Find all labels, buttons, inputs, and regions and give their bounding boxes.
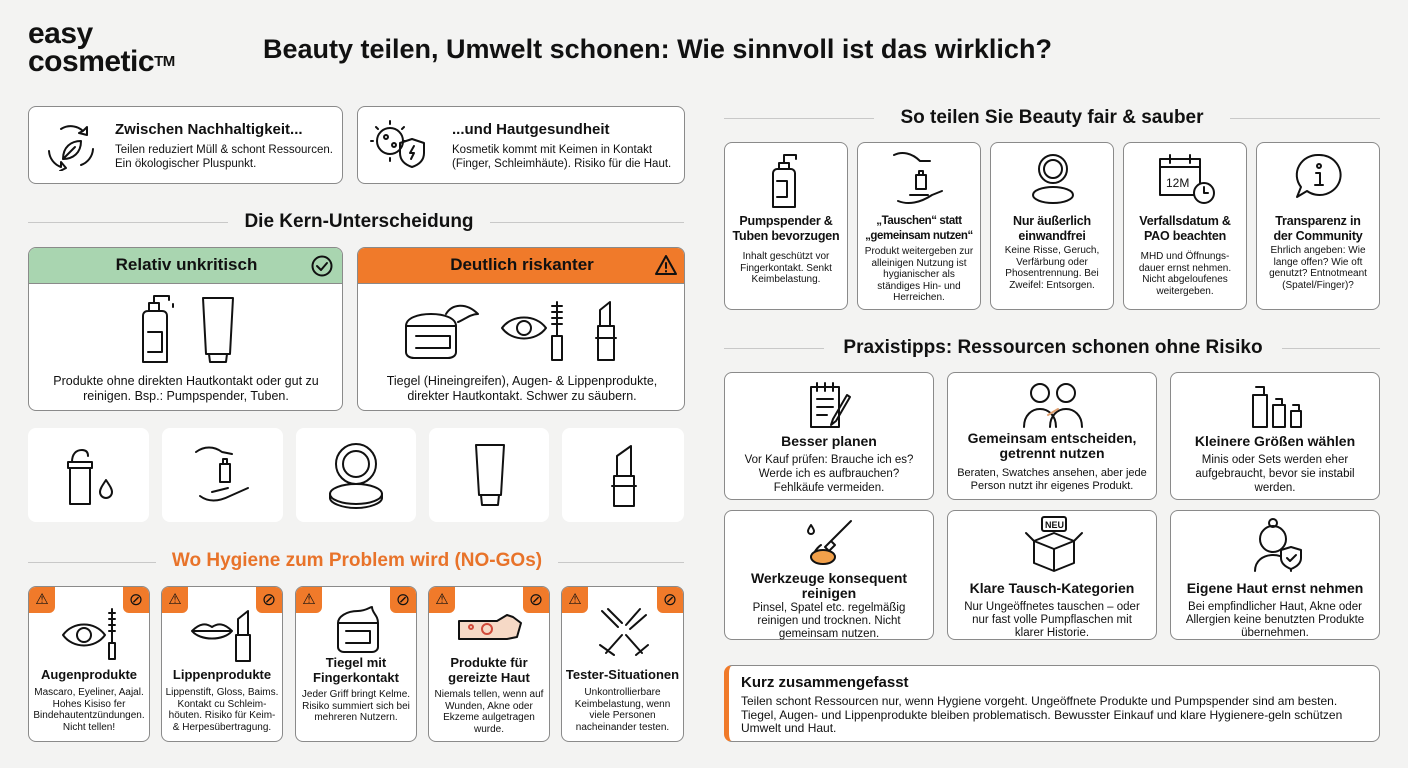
card: gereizte Haut: ⊘ bbox=[529, 590, 543, 609]
panel: Relativ unkritisch: Produkte ohne direkten Hautkontakt oder gut zu reinigen. Bsp.: Pumpspender, Tuben. bbox=[53, 374, 319, 403]
summary box bbox=[724, 665, 1380, 742]
card: Lippenprodukte: ⚠ bbox=[168, 591, 182, 608]
tip: Besser planen bbox=[724, 372, 934, 500]
card: Tauschen: „Tauschen“ statt „gemeinsam nutzen“ bbox=[865, 215, 973, 242]
icon: recycle leaf bbox=[48, 125, 94, 171]
panel: Deutlich riskanter: Tiegel (Hineingreifen), Augen- & Lippenprodukte, direkter Hautkontakt. Schwer zu säubern. bbox=[387, 374, 657, 403]
card: Augenprodukte: Mascaro, Eyeliner, Aajal. Hohes Kisiso fer Bindehautentzündungen. Nicht tellen! bbox=[33, 687, 145, 732]
card: Hautgesundheit: Kosmetik kommt mit Keimen in Kontakt bbox=[452, 144, 652, 156]
tip: Klare Tausch-Kategorien: Klare Tausch-Kategorien bbox=[970, 580, 1134, 596]
tip: Werkzeuge: Pinsel, Spatel etc. regelmäßig reinigen und trocknen. Nicht gemeinsam nutzen. bbox=[753, 602, 905, 640]
tip: Werkzeuge: Werkzeuge konsequent reinigen bbox=[751, 570, 907, 601]
card: Tester: ⚠ bbox=[568, 591, 582, 608]
card: Transparenz: Transparenz in bbox=[1275, 214, 1361, 228]
tip: Gemeinsam entscheiden: Beraten, Swatches ansehen, aber jede Person nutzt ihr eigenes Produkt. bbox=[957, 467, 1147, 492]
icons: jar, eye, lipstick bbox=[405, 301, 617, 361]
title: Beauty teilen, Umwelt schonen: Wie sinnvoll ist das wirklich? bbox=[263, 34, 1052, 64]
heading: So teilen: So teilen Sie Beauty fair & sauber bbox=[900, 107, 1204, 128]
tip: Eigene Haut: Eigene Haut ernst nehmen bbox=[1187, 580, 1363, 596]
tip: Eigene Haut: Bei empfindlicher Haut, Akne oder Allergien keine benutzten Produkte übernehmen. bbox=[1186, 601, 1364, 639]
card: Verfallsdatum: Verfallsdatum & PAO beachten bbox=[1139, 214, 1231, 243]
card: Transparenz: der Community bbox=[1273, 229, 1363, 243]
tip: Besser planen: Besser planen bbox=[781, 433, 877, 449]
card: Tiegel bbox=[295, 586, 417, 742]
tile: compact bbox=[296, 428, 416, 522]
tip: Eigene Haut bbox=[1170, 510, 1380, 640]
tile: lipstick bbox=[562, 428, 684, 522]
tip: Besser planen: Vor Kauf prüfen: Brauche ich es? Werde ich es aufbrauchen? Fehlkäufe vermeiden. bbox=[745, 454, 913, 494]
tip: Gemeinsam entscheiden: Gemeinsam entscheiden, getrennt nutzen bbox=[968, 430, 1136, 461]
tip: Klare Tausch-Kategorien: NEU bbox=[1045, 520, 1064, 530]
NO-GO cards bbox=[28, 586, 684, 742]
summary box: Kurz zusammengefasst bbox=[741, 674, 909, 691]
tip: Werkzeuge bbox=[724, 510, 934, 640]
card: Hautgesundheit bbox=[357, 106, 685, 184]
card: gereizte Haut: Produkte für gereizte Haut bbox=[448, 655, 530, 685]
icon: warning bbox=[655, 255, 677, 275]
card: Augenprodukte: ⊘ bbox=[129, 590, 143, 609]
card: äußerlich einwandfrei bbox=[990, 142, 1114, 310]
panel: Deutlich riskanter: Deutlich riskanter bbox=[450, 255, 594, 274]
card: Nachhaltigkeit: Ein ökologischer Pluspunkt. bbox=[115, 158, 256, 170]
card: Hautgesundheit: ...und Hautgesundheit bbox=[452, 121, 610, 138]
icon: check bbox=[312, 256, 332, 276]
card: Verfallsdatum bbox=[1123, 142, 1247, 310]
tip: Gemeinsam entscheiden bbox=[947, 372, 1157, 500]
card: Hautgesundheit: (Finger, Schleimhäute). Risiko für die Haut. bbox=[452, 158, 671, 170]
card: Tiegel: Tiegel mit Fingerkontakt bbox=[313, 655, 399, 685]
tip: Kleinere Größen bbox=[1170, 372, 1380, 500]
card: Lippenprodukte bbox=[161, 586, 283, 742]
tip: Kleinere Größen: Minis oder Sets werden eher aufgebraucht, bevor sie instabil werden. bbox=[1195, 454, 1355, 494]
card: Lippenprodukte: Lippenstift, Gloss, Baims. Kontakt cu Schleim-höuten. Risiko für Keim- & Herpesübertragung. bbox=[166, 687, 278, 732]
card: Nachhaltigkeit bbox=[28, 106, 343, 184]
card: Tiegel: Jeder Griff bringt Kelme. Risiko summiert sich bei mehreren Nutzern. bbox=[302, 689, 410, 723]
card: Augenprodukte: ⚠ bbox=[35, 591, 49, 608]
card: Transparenz: Ehrlich angeben: Wie lange offen? Wie oft genutzt? Entnotmeant (Spatel/Finger)? bbox=[1269, 245, 1367, 290]
card: gereizte Haut: Niemals tellen, wenn auf Wunden, Akne oder Ekzeme aulgetragen wurde. bbox=[435, 689, 543, 734]
card: gereizte Haut bbox=[428, 586, 550, 742]
card: Lippenprodukte: Lippenprodukte bbox=[173, 667, 271, 682]
card: Tiegel: ⊘ bbox=[396, 590, 410, 609]
practice tips grid bbox=[724, 372, 1380, 640]
logo: easy bbox=[28, 17, 93, 50]
card: Tester: ⊘ bbox=[663, 590, 677, 609]
card: Verfallsdatum: 12M bbox=[1166, 176, 1189, 190]
tile: hands bottle bbox=[162, 428, 283, 522]
card: Pumpspender bbox=[724, 142, 848, 310]
card: Lippenprodukte: ⊘ bbox=[262, 590, 276, 609]
card: äußerlich einwandfrei: Keine Risse, Geruch, Verfärbung oder Phosentrennung. Bei Zweifel: Entsorgen. bbox=[1005, 245, 1099, 290]
card: Transparenz bbox=[1256, 142, 1380, 310]
heading: NO-GOs: Wo Hygiene zum Problem wird (NO-GOs) bbox=[172, 550, 542, 571]
icon row tiles bbox=[28, 428, 684, 522]
card: Tester: Unkontrollierbare Keimbelastung, wenn viele Personen nacheinander testen. bbox=[575, 687, 670, 732]
card: Nachhaltigkeit: Teilen reduziert Müll & schont Ressourcen. bbox=[115, 144, 333, 156]
tile: jar drop bbox=[28, 428, 149, 522]
panel: Relativ unkritisch bbox=[28, 247, 343, 411]
logo bbox=[28, 17, 175, 78]
card: Tauschen: Produkt weitergeben zur alleinigen Nutzung ist hygianischer als ständiges Hin- und Herreichen. bbox=[865, 246, 973, 303]
tip: Klare Tausch-Kategorien: Nur Ungeöffnetes tauschen – oder nur fast volle Pumpflaschen mit klarer Historie. bbox=[964, 601, 1140, 639]
panel: Relativ unkritisch: Relativ unkritisch bbox=[116, 255, 257, 274]
icon: germ shield bbox=[370, 120, 425, 168]
card: Tauschen bbox=[857, 142, 981, 310]
card: Augenprodukte: Augenprodukte bbox=[41, 667, 137, 682]
card: Pumpspender: Pumpspender & Tuben bevorzugen bbox=[732, 214, 840, 243]
card: Tester: Tester-Situationen bbox=[566, 667, 679, 682]
card: Tiegel: ⚠ bbox=[302, 591, 316, 608]
card: gereizte Haut: ⚠ bbox=[435, 591, 449, 608]
card: Verfallsdatum: MHD und Öffnungs-dauer ernst nehmen. Nicht abgeloufenes weitergeben. bbox=[1139, 251, 1231, 296]
summary box: Teilen schont Ressourcen nur, wenn Hygiene vorgeht. Ungeöffnete Produkte und Pumpspender sind am besten. Tiegel, Augen- und Lippenprodukte bleiben problematisch. Bewusster Einkauf und klare Hygienere-geln schützen Umwelt und Haut. bbox=[741, 694, 1342, 735]
heading: Kern-Unterscheidung: Die Kern-Unterscheidung bbox=[244, 211, 474, 232]
tip: Klare Tausch-Kategorien bbox=[947, 510, 1157, 640]
logo: cosmeticTM bbox=[28, 45, 175, 78]
card: Augenprodukte bbox=[28, 586, 150, 742]
tile: tube bbox=[429, 428, 549, 522]
panel: Deutlich riskanter bbox=[357, 247, 685, 411]
icons: pump and tube bbox=[142, 295, 234, 363]
card: Tester bbox=[561, 586, 684, 742]
card: äußerlich einwandfrei: Nur äußerlich einwandfrei bbox=[1013, 214, 1091, 243]
tip: Kleinere Größen: Kleinere Größen wählen bbox=[1195, 433, 1355, 449]
sharing tips cards bbox=[724, 142, 1380, 310]
card: Nachhaltigkeit: Zwischen Nachhaltigkeit... bbox=[115, 121, 303, 138]
card: Pumpspender: Inhalt geschützt vor Fingerkontakt. Senkt Keimbelastung. bbox=[740, 251, 832, 285]
heading: Praxistipps: Praxistipps: Ressourcen schonen ohne Risiko bbox=[843, 337, 1263, 358]
